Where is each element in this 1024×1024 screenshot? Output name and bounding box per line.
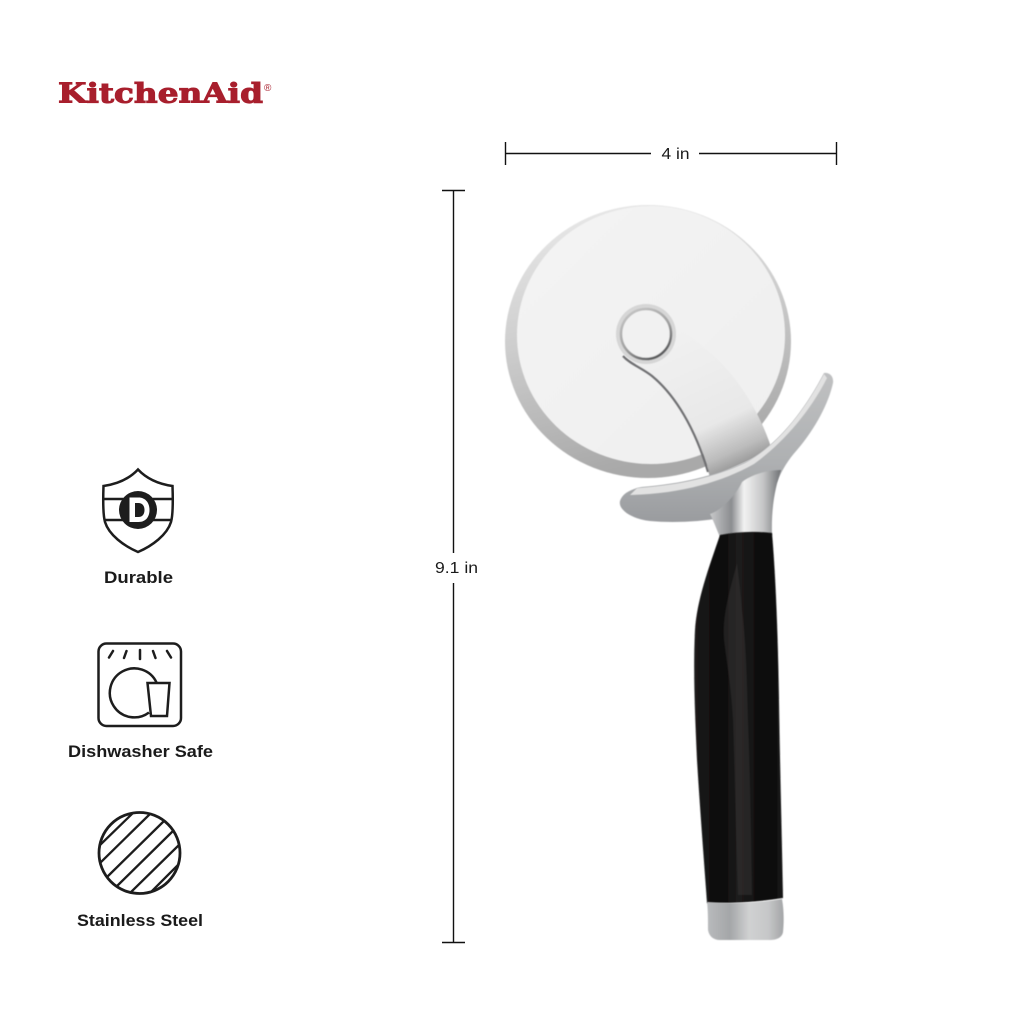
label: Durable: Durable — [104, 568, 173, 587]
wheel arm — [622, 326, 772, 478]
cutter wheel — [505, 205, 791, 478]
black handle — [694, 532, 783, 903]
label: Stainless Steel: Stainless Steel — [77, 911, 203, 930]
width dimension: 4 in: 4 in — [662, 146, 690, 163]
end cap — [707, 899, 784, 940]
logo: KitchenAid: KitchenAid — [58, 78, 263, 110]
metal neck — [710, 470, 781, 537]
handle highlight — [724, 563, 752, 895]
finger guard — [620, 373, 833, 522]
icon: dishwasher — [98, 644, 181, 726]
hub — [616, 304, 676, 364]
width dimension: 4 in — [505, 142, 836, 165]
feature: durable — [103, 470, 173, 587]
pizza cutter product — [505, 205, 833, 940]
feature: dishwasher safe — [68, 644, 213, 761]
guard highlight — [630, 374, 827, 495]
arm shadow edge — [623, 356, 708, 472]
height dimension: 9.1 in: 9.1 in — [435, 560, 478, 577]
feature: stainless steel — [77, 811, 203, 930]
icon: shield — [103, 470, 173, 552]
logo: KitchenAid: ® — [264, 83, 272, 94]
label: Dishwasher Safe: Dishwasher Safe — [68, 742, 213, 761]
icon: hatched circle — [98, 811, 180, 894]
height dimension: 9.1 in — [435, 190, 478, 942]
